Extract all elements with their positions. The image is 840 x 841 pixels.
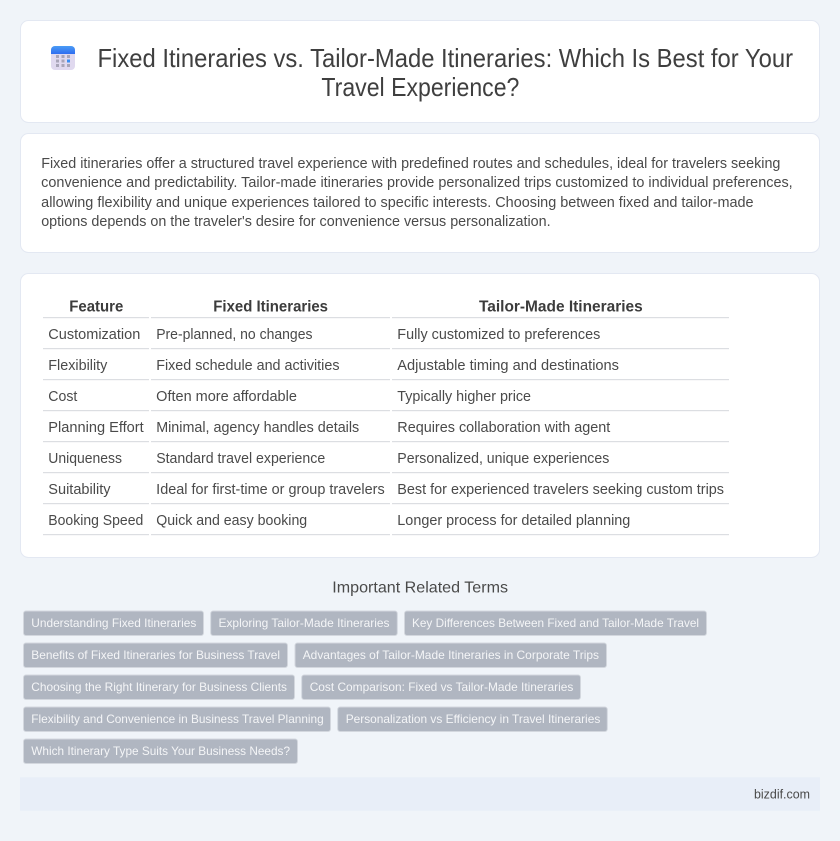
row: booking speed: Booking Speed: [48, 513, 143, 529]
intro paragraph: [41, 156, 793, 230]
table header: [69, 299, 643, 316]
tag: Key Differences Between Fixed and Tailor-Made Travel: [412, 616, 699, 630]
row: suitability: Suitability: [48, 482, 111, 498]
title: [98, 45, 793, 102]
row: planning effort: Minimal, agency handles details: [156, 420, 359, 436]
row: customization: [48, 327, 600, 343]
title: Fixed Itineraries vs. Tailor-Made Itineraries: Which Is Best for Your: [98, 45, 793, 73]
row: suitability: Best for experienced travelers seeking custom trips: [397, 482, 724, 498]
intro paragraph: convenience and predictability. Tailor-made itineraries provide personalized trips customized to individual preferences,: [41, 175, 793, 191]
tag: [24, 611, 204, 636]
row: uniqueness: Personalized, unique experiences: [397, 451, 609, 467]
icon: calendar: [51, 46, 75, 70]
row: booking speed: Quick and easy booking: [156, 513, 307, 529]
tag: Flexibility and Convenience in Business Travel Planning: [31, 712, 324, 726]
tag: [24, 643, 288, 668]
row: planning effort: Planning Effort: [48, 420, 144, 436]
panel: introduction: [20, 134, 820, 252]
tag: Which Itinerary Type Suits Your Business Needs?: [31, 744, 290, 758]
tag: [24, 675, 294, 700]
tag: Exploring Tailor-Made Itineraries: [218, 616, 390, 630]
row: customization: Fully customized to preferences: [397, 327, 600, 343]
intro paragraph: allowing flexibility and unique experiences tailored to specific interests. Choosing between fixed and tailor-made: [41, 195, 754, 211]
tag: Choosing the Right Itinerary for Business Clients: [31, 680, 287, 694]
tag: [211, 611, 397, 636]
row: suitability: Ideal for first-time or group travelers: [156, 482, 385, 498]
table header: Tailor-Made Itineraries: [479, 299, 643, 316]
row: customization: Customization: [48, 327, 140, 343]
row: flexibility: Flexibility: [48, 358, 108, 374]
tag: [295, 643, 606, 668]
title: Travel Experience?: [321, 74, 519, 102]
footer: [20, 777, 820, 811]
row: cost: [48, 389, 531, 405]
tag: Cost Comparison: Fixed vs Tailor-Made Itineraries: [310, 680, 573, 694]
tag: Advantages of Tailor-Made Itineraries in Corporate Trips: [303, 648, 599, 662]
row: uniqueness: Standard travel experience: [156, 451, 325, 467]
row: suitability: [48, 482, 724, 498]
row: booking speed: Longer process for detailed planning: [397, 513, 630, 529]
table header: Fixed Itineraries: [213, 299, 328, 316]
row: cost: Cost: [48, 389, 77, 405]
heading: related terms: Important Related Terms: [332, 580, 508, 597]
panel: comparison table: [20, 274, 820, 558]
intro paragraph: options depends on the traveler's desire for convenience versus personalization.: [41, 214, 551, 230]
panel: title header: [20, 20, 820, 122]
row: planning effort: [48, 420, 610, 436]
intro paragraph: Fixed itineraries offer a structured travel experience with predefined routes and schedules, ideal for travelers seeking: [41, 156, 780, 172]
tag: [24, 707, 330, 732]
row: booking speed: [48, 513, 630, 529]
row: customization: Pre-planned, no changes: [156, 327, 312, 343]
tag: [24, 739, 298, 764]
tag: [302, 675, 580, 700]
tag: [338, 707, 607, 732]
row: cost: Typically higher price: [397, 389, 531, 405]
row: uniqueness: [48, 451, 609, 467]
tag: Understanding Fixed Itineraries: [31, 616, 196, 630]
footer: bizdif.com: [754, 786, 810, 801]
row: flexibility: [48, 358, 619, 374]
tag: Personalization vs Efficiency in Travel Itineraries: [346, 712, 600, 726]
row: planning effort: Requires collaboration with agent: [397, 420, 610, 436]
table header: Feature: [69, 299, 124, 316]
row: flexibility: Adjustable timing and destinations: [397, 358, 619, 374]
row: flexibility: Fixed schedule and activities: [156, 358, 340, 374]
tag: [404, 611, 706, 636]
row: cost: Often more affordable: [156, 389, 297, 405]
tag: Benefits of Fixed Itineraries for Business Travel: [31, 648, 280, 662]
panel: related term tags: [24, 611, 706, 764]
row: uniqueness: Uniqueness: [48, 451, 122, 467]
